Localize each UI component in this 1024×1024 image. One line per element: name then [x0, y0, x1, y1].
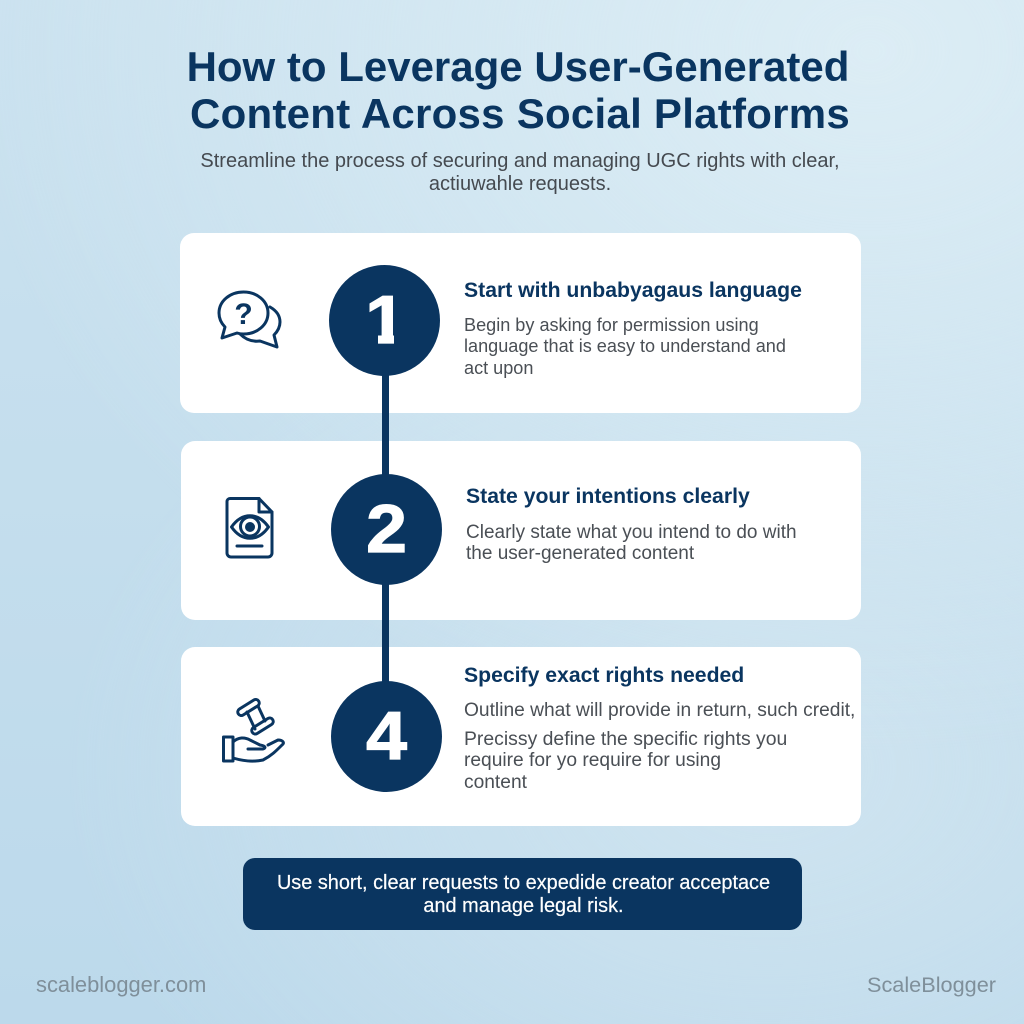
- subtitle: [200, 150, 840, 195]
- step 2 heading: State your intentions clearly: [466, 485, 750, 508]
- step badge 2: 2: [366, 491, 407, 567]
- step 2 text: [466, 485, 797, 564]
- icon: document with eye: [226, 497, 274, 558]
- panel: step 1 card: [180, 233, 861, 413]
- connector line: [382, 350, 389, 710]
- panel: step 3 card: [181, 647, 861, 826]
- step badge 1: 1: [365, 282, 406, 358]
- title: [187, 43, 850, 137]
- step 3 text: [464, 664, 855, 792]
- title: How to Leverage User-Generated: [187, 43, 849, 90]
- step 1 text: [464, 279, 802, 378]
- footer right: ScaleBlogger: [867, 972, 996, 997]
- step badge 1: [329, 265, 440, 376]
- step 1 heading: Start with unbabyagaus language: [464, 279, 802, 302]
- step 3 body: require for yo require for using: [464, 750, 721, 771]
- callout: Use short, clear requests to expedide creator acceptace: [277, 872, 770, 894]
- step 1 body: Begin by asking for permission using: [464, 314, 759, 334]
- footer left: scaleblogger.com: [36, 972, 206, 997]
- step 3 body: [464, 700, 855, 792]
- icon: question speech bubbles: ?: [234, 298, 253, 331]
- step 3 body: Outline what will provide in return, such credit, Precissy define the specific rights you: [464, 700, 855, 750]
- callout: [243, 858, 804, 930]
- subtitle: Streamline the process of securing and managing UGC rights with clear,: [200, 150, 840, 172]
- step 2 body: [466, 522, 797, 564]
- step 3 heading: Specify exact rights needed: [464, 664, 744, 687]
- subtitle: actiuwahle requests.: [429, 173, 611, 195]
- icon: gavel over open hand: [222, 698, 285, 763]
- step 1 body: [464, 314, 786, 378]
- step 1 body: act upon: [464, 358, 533, 378]
- step badge 4: [331, 681, 442, 792]
- step 1 body: language that is easy to understand and: [464, 336, 786, 356]
- step badge 2: [331, 474, 442, 585]
- title: Content Across Social Platforms: [190, 90, 850, 137]
- panel: step 2 card: [181, 441, 861, 620]
- step badge 4: 4: [366, 698, 407, 774]
- step 3 body: content: [464, 772, 527, 792]
- callout: and manage legal risk.: [423, 895, 624, 917]
- icon: question speech bubbles: [218, 290, 282, 348]
- step 2 body: Clearly state what you intend to do with: [466, 522, 797, 542]
- step 2 body: the user-generated content: [466, 543, 694, 564]
